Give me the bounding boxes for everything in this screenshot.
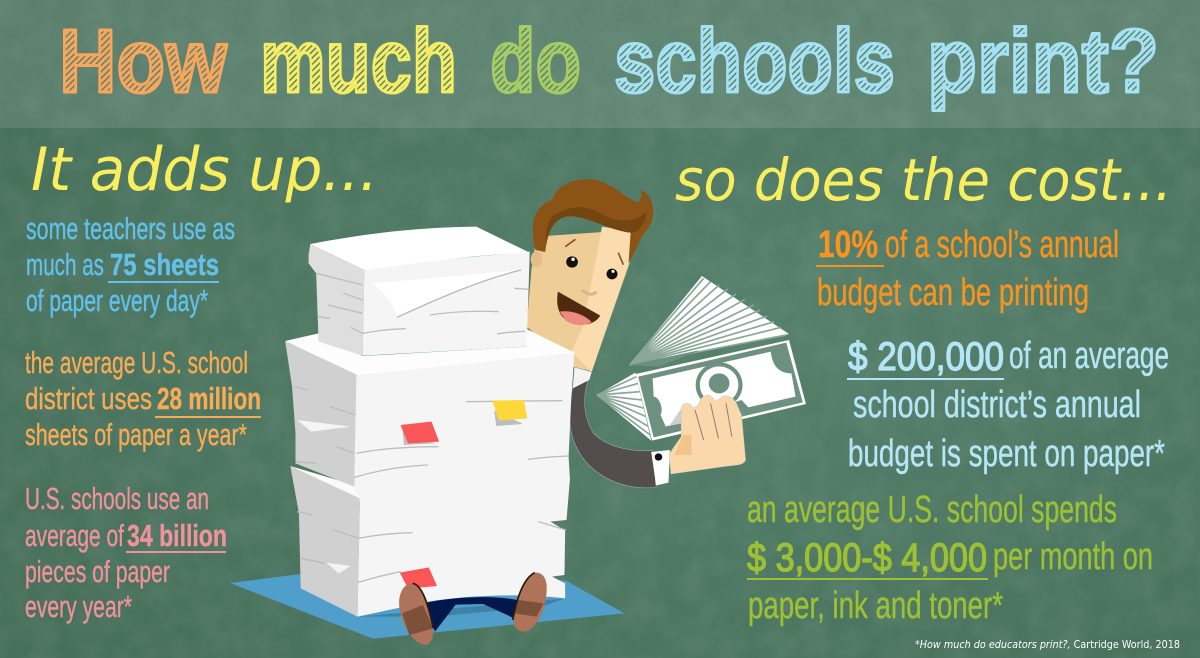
top ream top xyxy=(310,227,530,270)
stat: 34 billion: pieces of paper xyxy=(25,554,170,589)
cuff button xyxy=(655,453,662,461)
title: schools xyxy=(614,12,895,112)
stat: 200,000 dollars: $ 200,000 xyxy=(848,335,1004,379)
trousers xyxy=(423,597,518,632)
stat: 75 sheets xyxy=(26,211,235,318)
folded sheet xyxy=(372,270,521,317)
stat: 75 sheets: 75 sheets xyxy=(110,247,219,282)
middle ream top xyxy=(285,328,574,375)
hand xyxy=(669,395,746,474)
jacket arm xyxy=(570,379,656,488)
stat: 28 million: the average U.S. school xyxy=(25,345,248,380)
heading: it adds up: It adds up... xyxy=(31,135,378,205)
top ream front xyxy=(363,252,530,356)
sheet corner left xyxy=(297,420,351,432)
hair xyxy=(533,179,653,263)
stat: 28 million: district uses xyxy=(25,381,152,416)
stat: 200,000 dollars xyxy=(847,335,1169,475)
stat: 34 billion: average of xyxy=(25,518,124,553)
title xyxy=(59,12,1159,112)
tongue xyxy=(560,311,592,325)
stat: 75 sheets: of paper every day* xyxy=(26,283,208,318)
sticky note red lower xyxy=(400,567,437,589)
illustration: man behind paper stack xyxy=(230,179,806,645)
sheet corner low xyxy=(326,563,351,573)
stat: 34 billion xyxy=(25,481,227,624)
sticky note yellow xyxy=(492,400,527,426)
sticky note red upper xyxy=(401,422,439,445)
stat: 3,000-4,000 dollars: $ 3,000-$ 4,000 xyxy=(747,536,987,580)
shoe right xyxy=(513,573,547,632)
ear xyxy=(531,251,542,267)
hair back and face xyxy=(527,179,653,372)
shirt cuff xyxy=(651,450,670,485)
mouth xyxy=(557,292,600,325)
sheet edges xyxy=(294,273,569,583)
nose xyxy=(583,291,595,294)
middle ream front xyxy=(354,352,574,500)
stat: 34 billion: every year* xyxy=(25,589,132,624)
title: do xyxy=(490,12,581,112)
stat: 28 million xyxy=(25,345,261,452)
stat: 34 billion: 34 billion xyxy=(127,518,227,553)
stat: 75 sheets: some teachers use as xyxy=(26,211,235,246)
footnote: *How much do educators print?, Cartridge World, 2018 xyxy=(915,638,1180,651)
banknote fan xyxy=(597,276,806,441)
blue mat xyxy=(230,574,624,639)
stat: 10 percent xyxy=(816,224,1119,314)
eye right xyxy=(606,269,618,279)
finger lines xyxy=(695,403,732,440)
title: How xyxy=(59,12,228,112)
stat: 3,000-4,000 dollars xyxy=(747,489,1153,627)
eye left xyxy=(566,256,578,268)
title: much xyxy=(260,12,457,112)
stat: 10 percent: budget can be printing xyxy=(817,272,1089,314)
hair shading xyxy=(546,207,647,242)
banknote xyxy=(636,340,806,441)
eyebrows xyxy=(565,239,623,265)
stat: 75 sheets: much as xyxy=(26,247,104,282)
shirt collar xyxy=(573,367,592,388)
shoe left xyxy=(399,583,433,645)
stat: 34 billion: U.S. schools use an xyxy=(25,481,209,516)
heading: so does the cost: so does the cost... xyxy=(675,146,1172,214)
title band xyxy=(0,0,1200,128)
bottom ream front xyxy=(357,478,570,617)
stat: 3,000-4,000 dollars: paper, ink and toner* xyxy=(748,585,1003,627)
middle ream side xyxy=(285,341,357,487)
paper stack xyxy=(285,227,574,617)
bottom ream top xyxy=(290,466,570,502)
stat: 10 percent: 10% xyxy=(818,224,878,266)
top ream side xyxy=(309,244,364,356)
bottom ream side xyxy=(290,466,360,617)
stat: 28 million: sheets of paper a year* xyxy=(25,417,247,452)
stack shadow on mat xyxy=(357,598,565,617)
stat: 28 million: 28 million xyxy=(157,381,261,416)
thumb shade xyxy=(674,435,692,455)
title: print? xyxy=(927,12,1159,112)
